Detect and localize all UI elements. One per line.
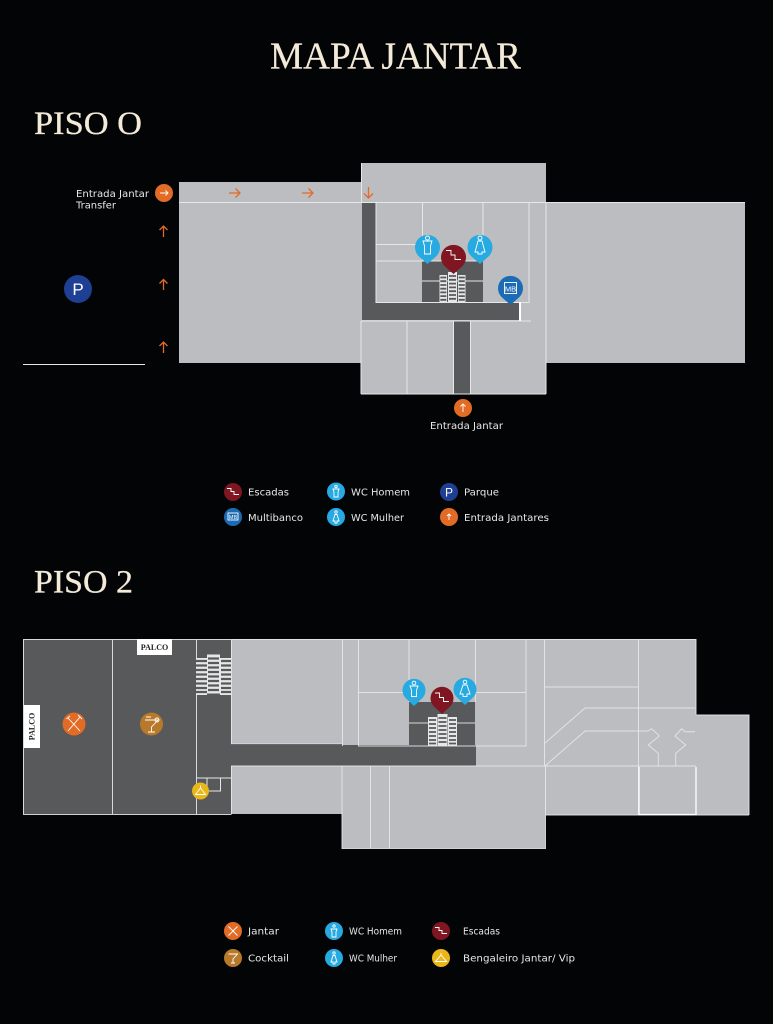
legend item: cocktail bbox=[224, 949, 289, 967]
icon: cocktail bbox=[140, 712, 163, 736]
icon: jantar bbox=[62, 712, 86, 736]
stairs: piso 2 center bbox=[428, 714, 457, 746]
stage label: palco left: PALCO bbox=[28, 713, 36, 740]
legend item: multibanco bbox=[224, 508, 303, 526]
heading: piso 2: PISO 2 bbox=[34, 564, 133, 600]
icon: entrada jantar transfer bbox=[155, 184, 173, 202]
legend item: entrada jantares: Entrada Jantares bbox=[464, 513, 549, 524]
pin: wc mulher piso 2 bbox=[454, 678, 477, 705]
legend item: multibanco: Multibanco bbox=[248, 513, 303, 524]
pin: wc homem bbox=[415, 235, 440, 264]
legend item: bengaleiro: Bengaleiro Jantar/ Vip bbox=[463, 954, 575, 964]
icon: bengaleiro bbox=[192, 782, 209, 800]
pin: multibanco bbox=[498, 276, 523, 305]
legend item: parque: Parque bbox=[464, 488, 499, 498]
label: entrada jantar transfer bbox=[75, 189, 150, 212]
legend item: parque bbox=[440, 483, 499, 501]
stairs: piso 0 bbox=[440, 272, 466, 302]
title: MAPA JANTAR bbox=[270, 36, 522, 78]
legend item: entrada jantares bbox=[440, 508, 549, 526]
pin: escadas piso 2 bbox=[430, 687, 454, 714]
legend item: wc homem: WC Homem bbox=[351, 488, 410, 498]
label: entrada jantar: Entrada Jantar bbox=[430, 421, 504, 432]
floor plan: piso 0 bbox=[23, 163, 745, 394]
legend item: wc homem: WC Homem bbox=[349, 926, 402, 938]
legend item: wc mulher bbox=[325, 949, 398, 967]
heading: piso 0: PISO O bbox=[34, 106, 142, 142]
legend item: wc mulher: WC Mulher bbox=[349, 954, 398, 964]
legend item: wc homem bbox=[325, 922, 402, 940]
legend item: parque: P bbox=[445, 486, 453, 500]
legend item: jantar: Jantar bbox=[247, 926, 280, 938]
stairs: piso 2 left bbox=[196, 654, 231, 695]
legend item: cocktail: Cocktail bbox=[248, 954, 289, 964]
legend: piso 2 bbox=[224, 922, 575, 967]
pin: wc mulher bbox=[468, 235, 492, 264]
stage label: palco top bbox=[137, 639, 172, 655]
label: entrada jantar transfer: Entrada Jantar bbox=[76, 189, 150, 200]
legend item: escadas: Escadas bbox=[248, 488, 289, 498]
legend item: wc homem bbox=[327, 482, 410, 500]
pin: wc homem piso 2 bbox=[402, 679, 426, 706]
legend item: wc mulher bbox=[327, 508, 405, 526]
line: parking edge bbox=[23, 364, 145, 366]
icon: entrada jantar bbox=[454, 399, 472, 417]
cloakroom box bbox=[196, 778, 231, 791]
legend: piso 0 bbox=[224, 482, 549, 526]
label: entrada jantar transfer: Transfer bbox=[75, 200, 117, 212]
legend item: wc mulher: WC Mulher bbox=[351, 513, 405, 524]
legend item: jantar bbox=[224, 922, 280, 940]
legend item: bengaleiro bbox=[432, 949, 575, 967]
stage label: palco left bbox=[24, 705, 40, 748]
icon: parking: P bbox=[72, 280, 84, 299]
pin: escadas bbox=[441, 245, 466, 274]
legend item: escadas: Escadas bbox=[463, 926, 500, 938]
floor plan: piso 2 bbox=[23, 639, 749, 848]
pin: multibanco: MB bbox=[505, 284, 516, 294]
legend item: escadas bbox=[224, 483, 289, 501]
legend item: multibanco: MB bbox=[229, 515, 237, 521]
stage label: palco top: PALCO bbox=[141, 643, 168, 652]
arrows: entrance route bbox=[160, 187, 373, 353]
legend item: escadas bbox=[432, 922, 500, 940]
icon: parking bbox=[64, 275, 92, 303]
